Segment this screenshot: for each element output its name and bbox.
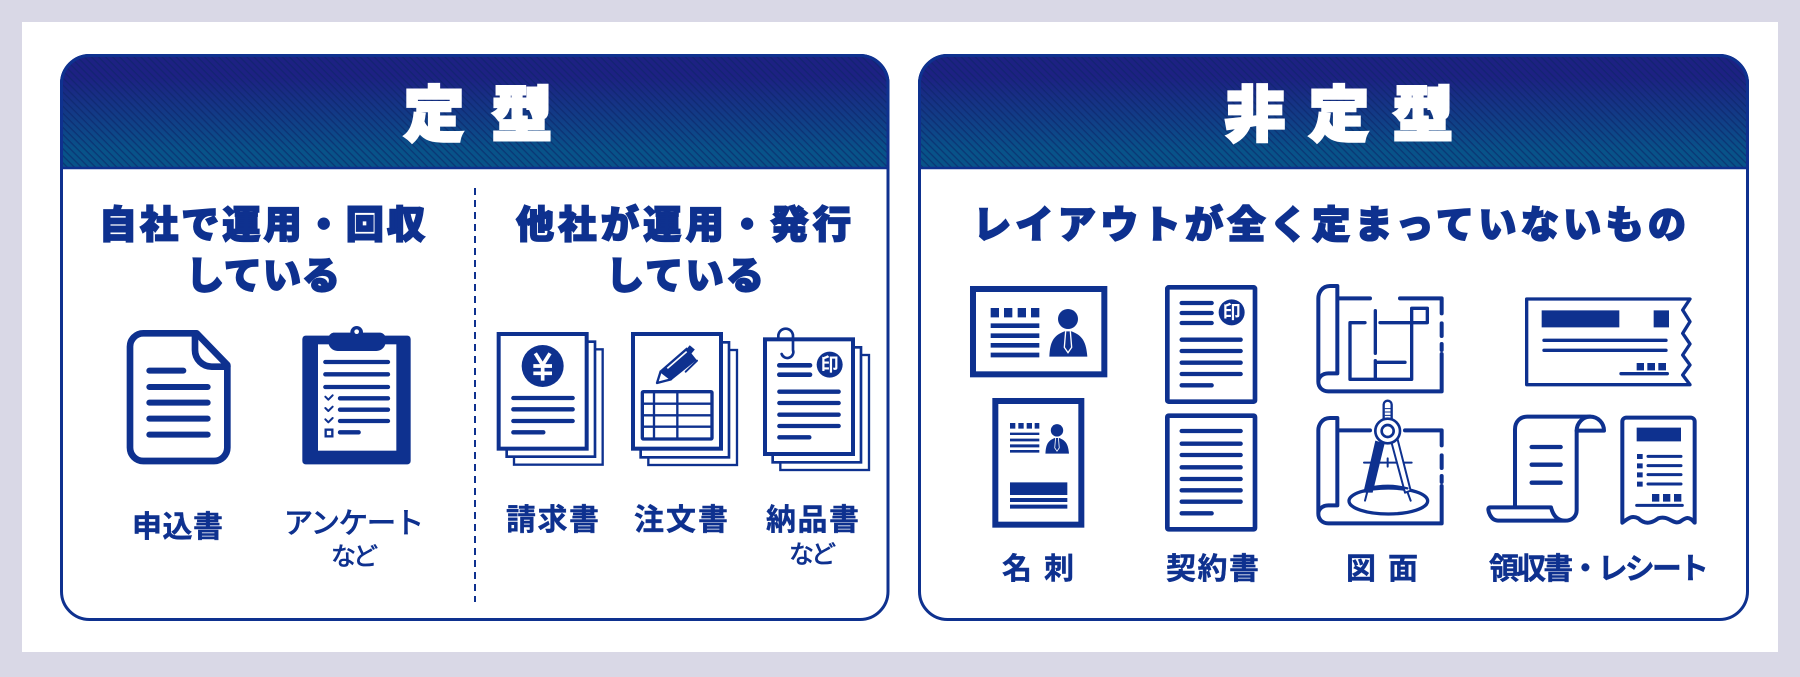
icon: 請求書 stacked invoice bbox=[499, 334, 603, 465]
icon: 名刺 business cards bbox=[973, 289, 1104, 525]
icon: アンケート clipboard bbox=[302, 326, 411, 464]
icon: 領収書 scroll receipt bbox=[1488, 417, 1604, 521]
heading: 非定型: 非定型 bbox=[1225, 82, 1453, 149]
label: 請求書: 請求書 bbox=[506, 504, 599, 537]
label: アンケートなど: アンケート bbox=[284, 508, 424, 540]
label: アンケートなど: など bbox=[331, 543, 378, 571]
label: 申込書: 申込書 bbox=[132, 511, 223, 544]
subheading: 他社が運用・発行している bbox=[516, 204, 851, 298]
label: 契約書: 契約書 bbox=[1166, 553, 1259, 586]
subheading: 他社が運用・発行している: 他社が運用・発行 bbox=[516, 204, 851, 247]
label: 納品書など: など bbox=[789, 541, 836, 569]
label: 注文書: 注文書 bbox=[634, 504, 728, 537]
subheading: 他社が運用・発行している: している bbox=[606, 256, 764, 298]
subheading: 自社で運用・回収している: 自社で運用・回収 bbox=[99, 205, 425, 247]
icon: 注文書 stacked order form bbox=[633, 334, 737, 465]
icon: 図面 blueprints bbox=[1318, 286, 1442, 523]
label: 名刺: 名刺 bbox=[1002, 553, 1074, 586]
header band bbox=[60, 54, 890, 168]
header band bbox=[918, 54, 1749, 168]
icon: レシート receipt bbox=[1622, 418, 1695, 523]
icon: 契約書 contracts: 印 bbox=[1223, 303, 1241, 323]
panel: 定型 bbox=[60, 54, 890, 620]
label: 図面: 図面 bbox=[1346, 553, 1418, 586]
panel: 非定型 bbox=[918, 54, 1749, 620]
label: アンケートなど bbox=[284, 508, 424, 571]
panel frame bbox=[62, 56, 888, 620]
panel frame bbox=[920, 56, 1748, 620]
icon: 納品書 stacked clipped document bbox=[765, 329, 869, 470]
label: 領収書・レシート: 領収書・レシート bbox=[1489, 553, 1709, 586]
icon: 領収書 check slip bbox=[1527, 299, 1690, 385]
subheading: レイアウトが全く定まっていないもの: レイアウトが全く定まっていないもの bbox=[973, 204, 1686, 247]
icon: 納品書 stacked clipped document: 印 bbox=[821, 355, 839, 375]
icon: 契約書 contracts bbox=[1167, 287, 1255, 529]
icon: 申込書 document bbox=[130, 333, 227, 461]
subheading: 自社で運用・回収している bbox=[99, 205, 425, 298]
label: 納品書など bbox=[766, 504, 859, 569]
label: 納品書など: 納品書 bbox=[766, 504, 859, 537]
subheading: 自社で運用・回収している: している bbox=[186, 256, 340, 298]
heading: 定型: 定型 bbox=[404, 82, 552, 149]
